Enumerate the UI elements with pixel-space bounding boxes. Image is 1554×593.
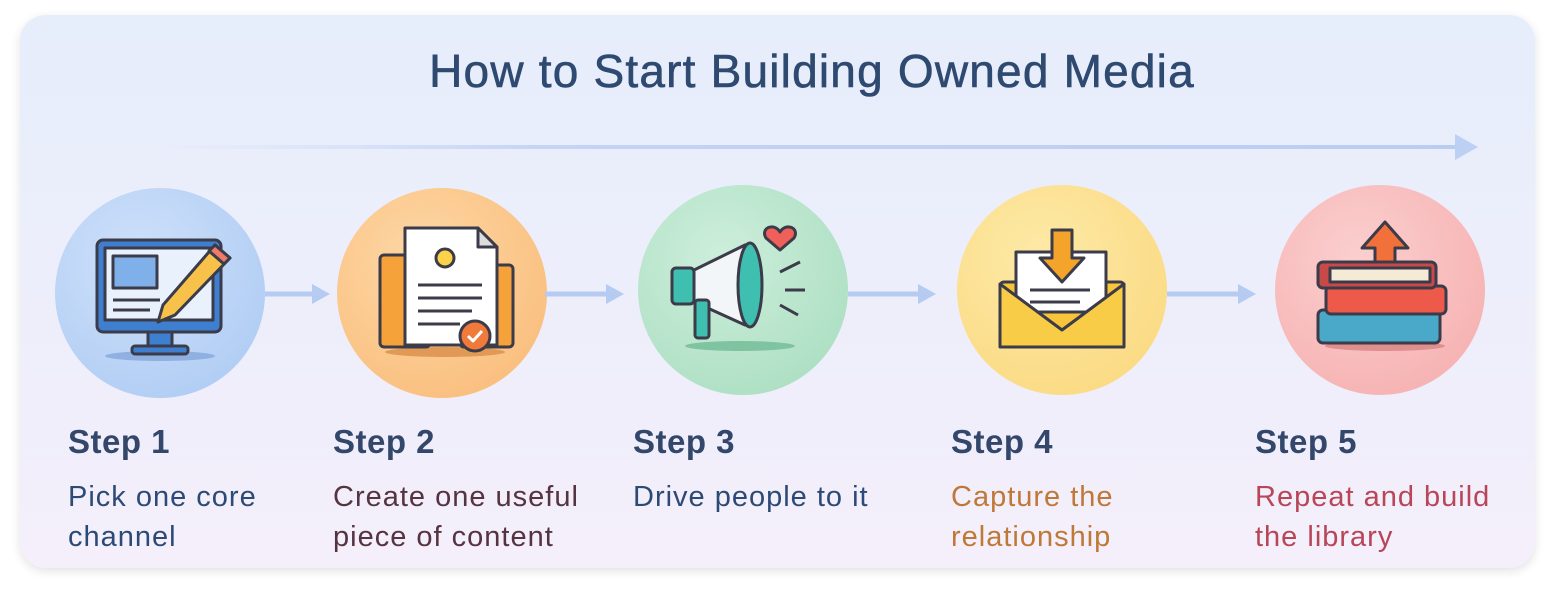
- step 1 text: [68, 481, 257, 553]
- title: How to Start Building Owned Media: [429, 45, 1195, 97]
- step 4 text: relationship: [951, 521, 1111, 553]
- step 4 label: Step 4: [951, 423, 1053, 460]
- step 1 label: Step 1: [68, 423, 170, 460]
- icon: document: [380, 228, 513, 357]
- step 1 text: Pick one core: [68, 481, 257, 513]
- step 5 text: the library: [1255, 521, 1393, 553]
- step 2 text: [333, 481, 579, 553]
- icon: megaphone: [672, 227, 805, 351]
- circle 1: [55, 188, 265, 398]
- circle 5: [1275, 185, 1485, 395]
- step 2 text: Create one useful: [333, 481, 579, 513]
- step 2 label: Step 2: [333, 423, 435, 460]
- step 5 label: Step 5: [1255, 423, 1357, 460]
- step 3 label: Step 3: [633, 423, 735, 460]
- icon: envelope: [1000, 230, 1124, 347]
- icon: computer: [97, 240, 230, 361]
- circle 3: [638, 185, 848, 395]
- step 5 text: [1255, 481, 1490, 553]
- step 3 text: Drive people to it: [633, 481, 869, 513]
- step 5 text: Repeat and build: [1255, 481, 1490, 513]
- icon: books: [1318, 222, 1446, 351]
- step 4 text: [951, 481, 1114, 553]
- circle 4: [957, 185, 1167, 395]
- step 4 text: Capture the: [951, 481, 1114, 513]
- circle 2: [337, 188, 547, 398]
- step 2 text: piece of content: [333, 521, 554, 553]
- step 1 text: channel: [68, 521, 177, 553]
